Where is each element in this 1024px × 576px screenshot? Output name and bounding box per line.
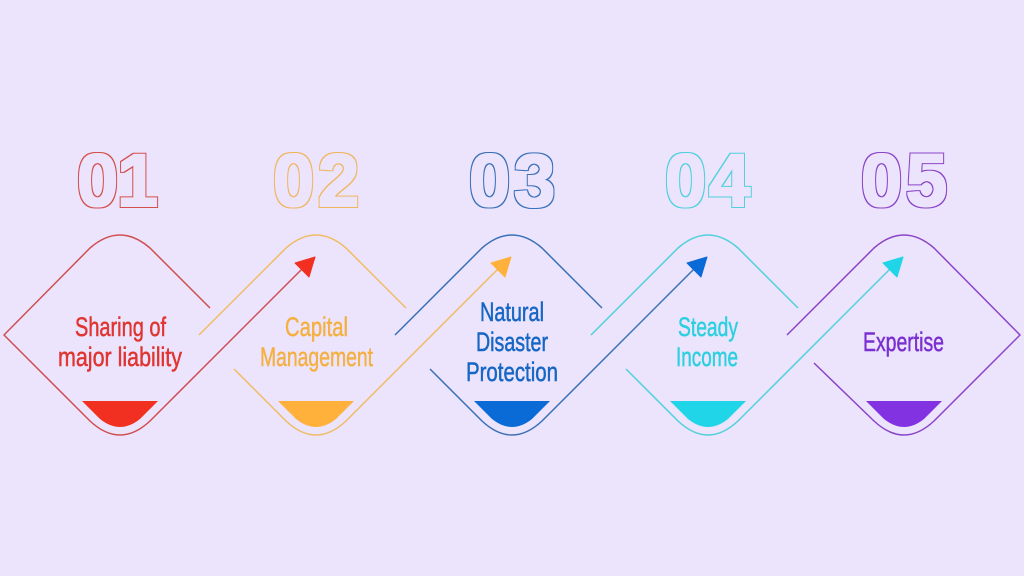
label 4: Income — [676, 342, 738, 372]
number 02: 02 — [273, 139, 359, 222]
label 3: Natural — [480, 297, 544, 327]
diamond outline 5 — [787, 235, 1020, 435]
number 05: 05 — [861, 139, 947, 222]
number 03: 03 — [469, 139, 555, 222]
label 1: Sharing of — [75, 312, 166, 342]
label 3: Protection — [466, 357, 558, 387]
bowl blue — [474, 401, 550, 427]
arrowhead cyan — [883, 257, 903, 277]
bowl cyan — [670, 401, 746, 427]
step 1: sharing of major liability — [4, 139, 315, 435]
label 5: Expertise — [863, 327, 944, 357]
bowl purple — [866, 401, 942, 427]
diamond outline and arrow line 3 — [395, 235, 695, 435]
label 2: Capital — [285, 312, 348, 342]
bowl yellow — [278, 401, 354, 427]
diamond outline and arrow line 4 — [591, 235, 891, 435]
step 4: steady income — [591, 139, 903, 435]
step 2: capital management — [199, 139, 511, 435]
arrowhead blue — [687, 257, 707, 277]
label 2: Management — [260, 342, 373, 372]
diamond outline and arrow line 2 — [199, 235, 499, 435]
bowl red — [82, 401, 158, 427]
number 01: 01 — [77, 139, 158, 222]
diamond outline and arrow line 1 — [4, 235, 303, 435]
label 4: Steady — [678, 312, 738, 342]
label 3: Disaster — [476, 327, 548, 357]
number 04: 04 — [665, 139, 750, 222]
step 5: expertise — [787, 139, 1020, 435]
arrowhead yellow — [491, 257, 511, 277]
label 1: major liability — [58, 342, 182, 372]
arrowhead red — [295, 257, 315, 277]
step 3: natural disaster protection — [395, 139, 707, 435]
